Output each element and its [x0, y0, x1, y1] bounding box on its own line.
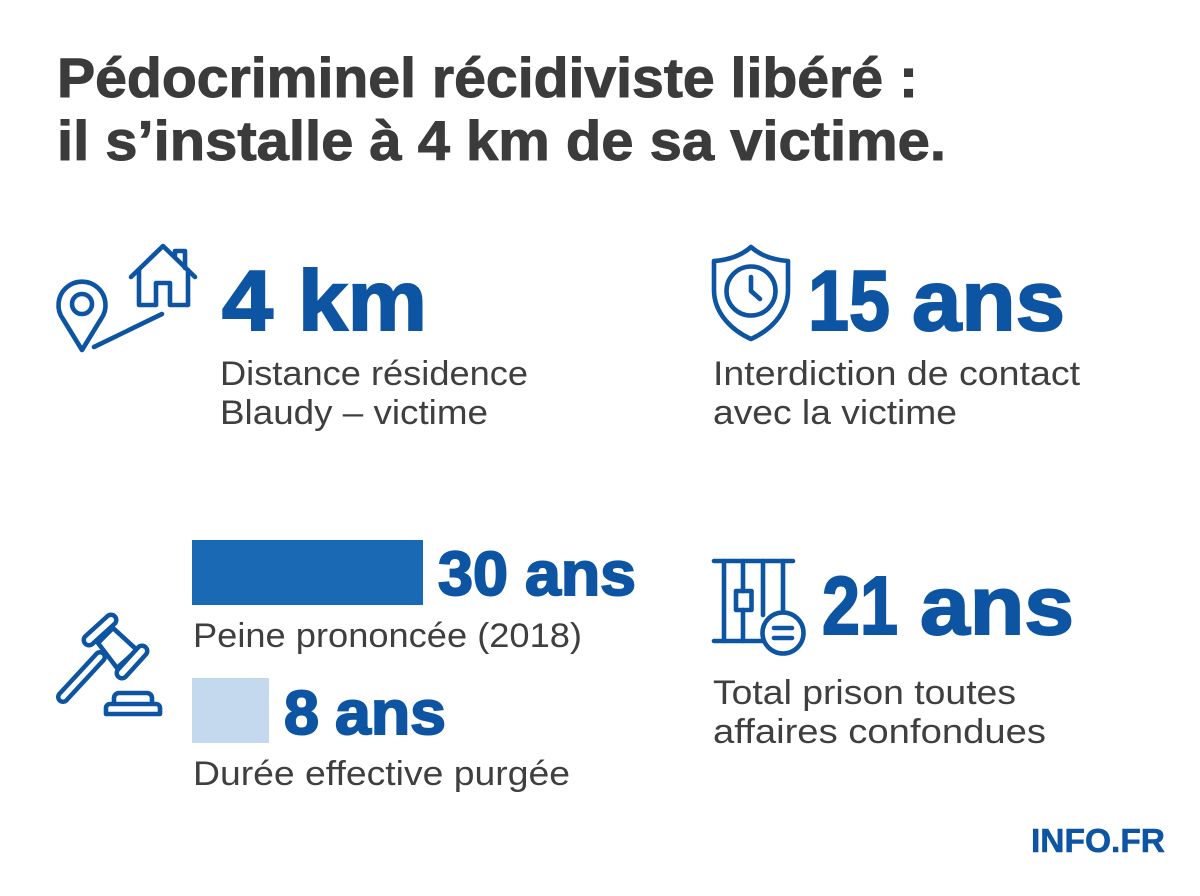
title	[57, 46, 946, 172]
stat: 30 ans: 30	[438, 540, 508, 609]
panel: sentence comparison	[63, 540, 636, 793]
label: total prison	[713, 674, 1046, 751]
panel: 21 ans total prison	[713, 559, 1074, 751]
icon: pin and house	[58, 246, 195, 350]
label: distance: Blaudy – victime	[220, 394, 488, 432]
label: distance	[220, 355, 528, 432]
stat: 21 ans: ans	[920, 559, 1074, 652]
stat: 30 ans: ans	[525, 540, 636, 609]
stat: 8 ans	[284, 679, 446, 748]
panel: 15 ans contact ban	[713, 247, 1080, 432]
label: served: Durée effective purgée	[193, 755, 570, 793]
bar: 30 ans	[192, 540, 423, 605]
stat: 4 km: km	[298, 254, 427, 349]
panel: 4 km distance	[58, 246, 528, 432]
stat: 15 ans	[808, 254, 1065, 349]
stat: 4 km: 4	[222, 254, 273, 349]
bar: 8 ans	[192, 678, 269, 743]
icon: prison bars	[714, 561, 804, 654]
label: sentence: Peine prononcée (2018)	[193, 617, 582, 655]
label: contact ban	[713, 355, 1080, 432]
stat: 21 ans: 21	[822, 559, 898, 652]
title: il s’installe à 4 km de sa victime.	[57, 109, 946, 172]
stat: 15 ans: ans	[912, 254, 1065, 349]
stat: 8 ans: ans	[335, 679, 446, 748]
label: distance: Distance résidence	[220, 355, 528, 393]
stat: 8 ans: 8	[284, 679, 319, 748]
stat: 21 ans	[822, 559, 1074, 652]
title: Pédocriminel récidiviste libéré :	[57, 46, 918, 109]
stat: 30 ans	[438, 540, 636, 609]
icon: shield with clock	[714, 247, 788, 339]
label: contact ban: Interdiction de contact	[713, 355, 1080, 393]
logo: INFO.FR: INFO.FR	[1031, 822, 1165, 859]
icon: gavel	[63, 620, 160, 714]
label: contact ban: avec la victime	[713, 394, 957, 432]
stat: 15 ans: 15	[808, 254, 890, 349]
stat: 4 km	[222, 254, 427, 349]
label: total prison: Total prison toutes	[713, 674, 1016, 712]
label: total prison: affaires confondues	[713, 713, 1046, 751]
